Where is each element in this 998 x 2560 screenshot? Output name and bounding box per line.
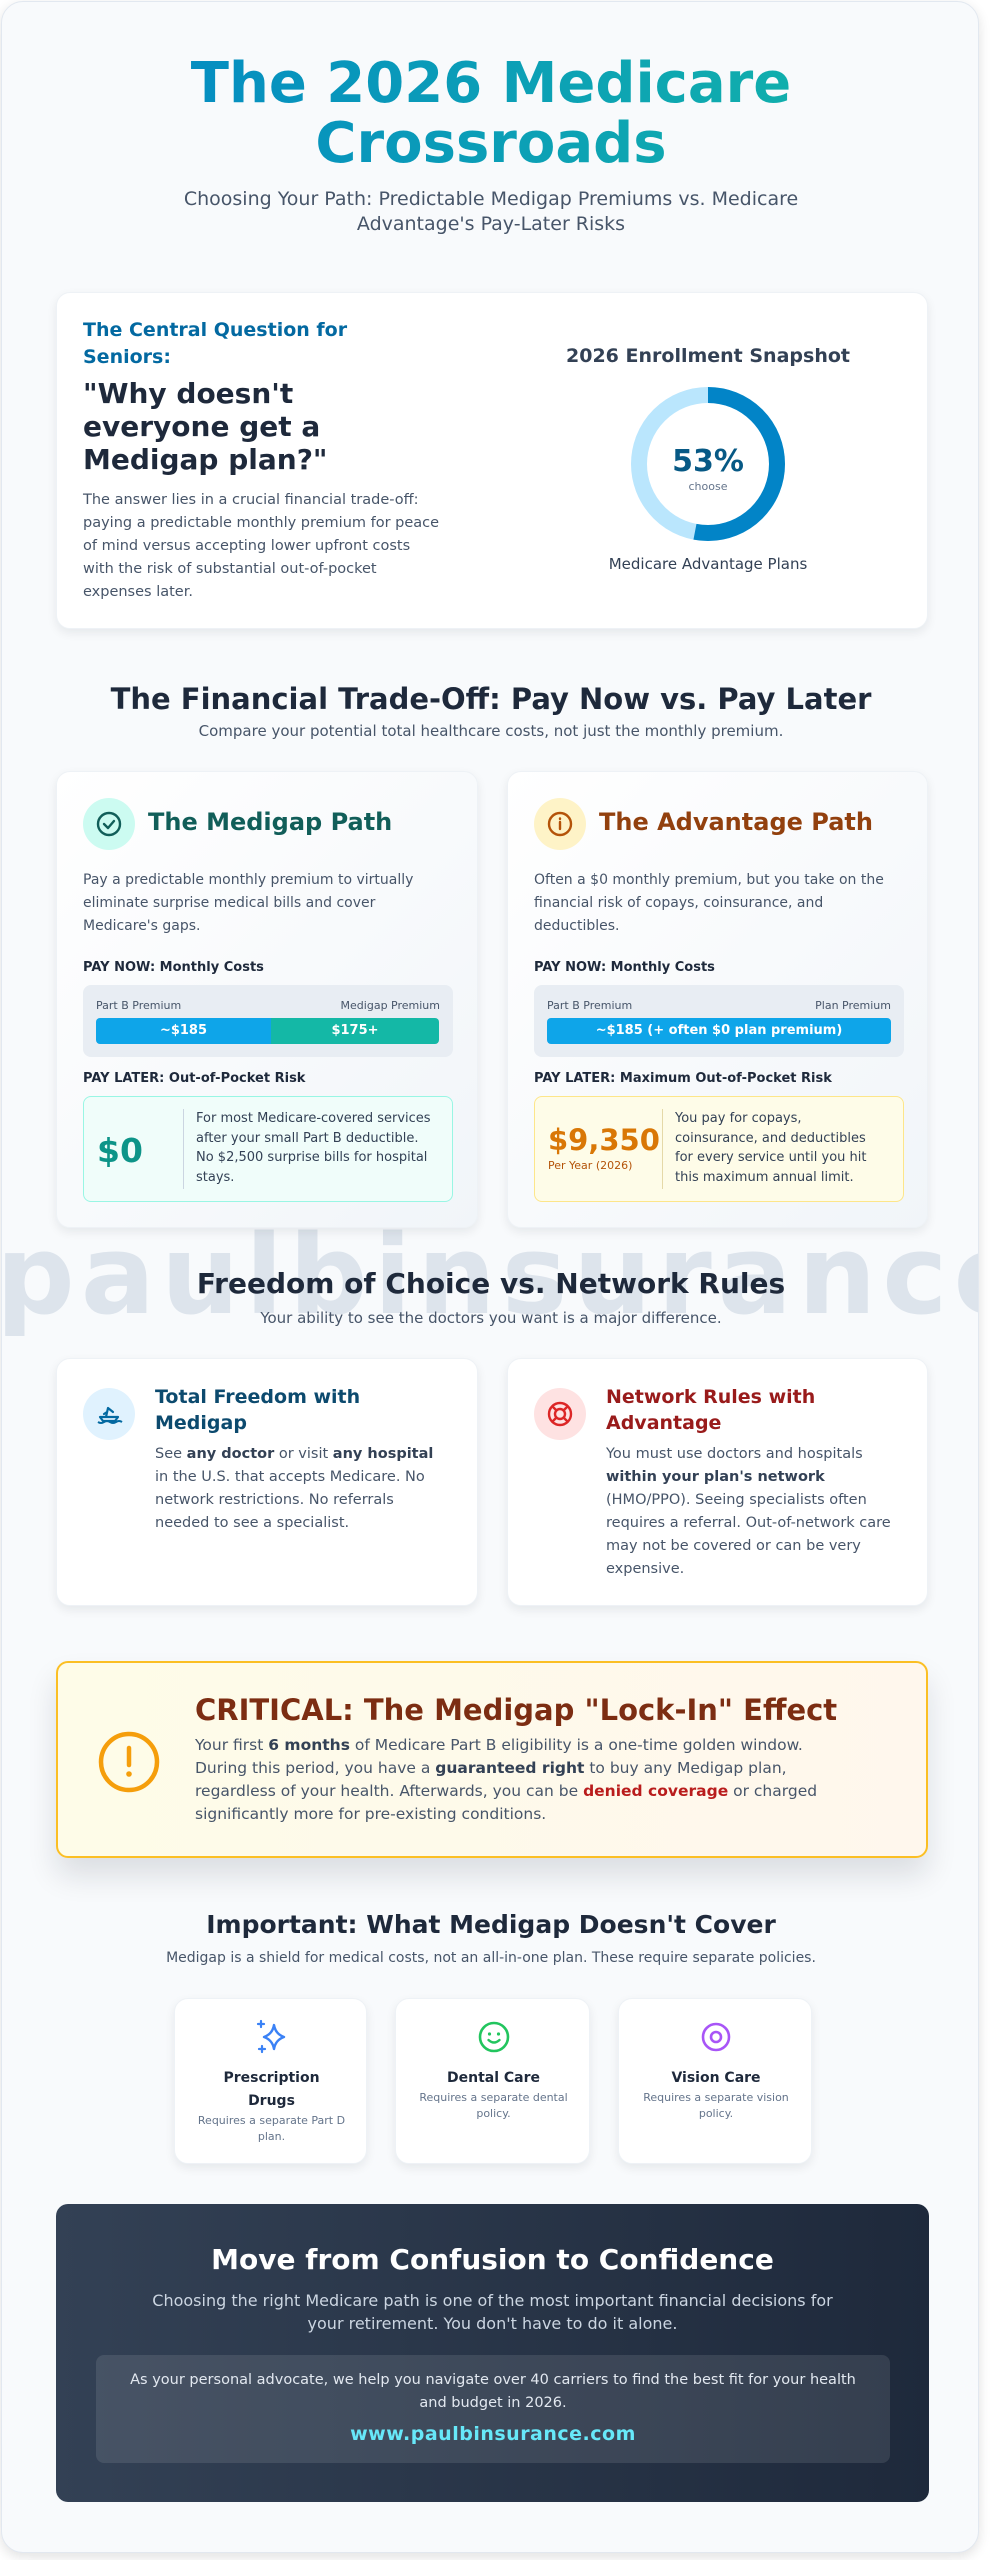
icon: ship — [83, 1388, 135, 1440]
label: pay now: PAY NOW: Monthly Costs — [534, 960, 715, 975]
title — [2, 54, 980, 174]
bar chart: monthly costs: Plan Premium — [815, 999, 891, 1012]
heading: Total Freedom with Medigap — [155, 1386, 360, 1434]
icon: sparkles — [256, 2020, 286, 2054]
chart: enrollment donut: 2026 Enrollment Snapshot — [566, 345, 850, 367]
callout: $9,350 risk: You pay for copays, coinsurance, and deductibles for every service until you hit this maximum annual limit. — [675, 1111, 866, 1184]
subheading: Your ability to see the doctors you want is a major difference. — [260, 1309, 722, 1327]
text: You must use doctors and hospitals within your plan's network (HMO/PPO). Seeing specialists often requires a referral. Out-of-network care may not be covered or can be very expensive. — [606, 1446, 891, 1577]
panel: dental care — [395, 1998, 590, 2164]
panel: intro — [56, 292, 928, 629]
icon: check — [83, 798, 135, 850]
panel: vision care: Vision Care — [671, 2070, 761, 2086]
label: pay later: PAY LATER: Out-of-Pocket Risk — [83, 1071, 305, 1086]
label: pay now: PAY NOW: Monthly Costs — [83, 960, 264, 975]
panel: network rules — [507, 1358, 928, 1606]
panel: advantage path — [507, 771, 928, 1228]
callout: $0 risk: For most Medicare-covered services after your small Part B deductible. No $2,500 surprise bills for hospital stays. — [196, 1111, 431, 1184]
heading: The Medigap Path — [148, 808, 392, 836]
chart: enrollment donut: Medicare Advantage Plans — [609, 555, 807, 573]
heading: The Advantage Path — [599, 808, 873, 836]
icon: smile — [478, 2022, 510, 2052]
icon: warning — [98, 1732, 160, 1792]
panel: dental care: Dental Care — [447, 2070, 540, 2086]
panel: prescription drugs: Prescription Drugs — [223, 2070, 320, 2109]
callout: $9,350 risk — [534, 1096, 904, 1202]
panel: vision care: Requires a separate vision policy. — [643, 2091, 789, 2120]
chart: enrollment donut: 53% — [672, 444, 744, 479]
panel: prescription drugs: Requires a separate Part D plan. — [198, 2114, 345, 2143]
quote: "Why doesn't everyone get a Medigap plan?" — [83, 377, 328, 476]
callout: advocate box: As your personal advocate, we help you navigate over 40 carriers to find the best fit for your health and budget in 2026. — [130, 2372, 856, 2411]
subheading: Compare your potential total healthcare costs, not just the monthly premium. — [199, 722, 783, 740]
chart: enrollment donut — [566, 345, 850, 573]
text: Choosing the right Medicare path is one of the most important financial decisions for your retirement. You don't have to do it alone. — [152, 2291, 833, 2333]
panel: vision care — [618, 1998, 812, 2164]
heading: Network Rules with Advantage — [606, 1386, 815, 1434]
callout: $0 risk: $0 — [97, 1131, 143, 1170]
callout: $9,350 risk: $9,350 — [548, 1123, 660, 1157]
bar chart: monthly costs: ~$185 (+ often $0 plan premium) — [596, 1023, 842, 1038]
subtitle: Choosing Your Path: Predictable Medigap Premiums vs. Medicare Advantage's Pay-Later Risks — [184, 188, 798, 235]
bar chart: monthly costs: $175+ — [331, 1023, 379, 1038]
heading: central question: The Central Question for Seniors: — [83, 319, 347, 368]
callout: $9,350 risk: Per Year (2026) — [548, 1159, 632, 1172]
heading: freedom of choice: Freedom of Choice vs. Network Rules — [197, 1267, 785, 1300]
bar chart: monthly costs: Part B Premium — [547, 999, 632, 1012]
panel: call to action — [56, 2204, 929, 2502]
label: pay later: PAY LATER: Maximum Out-of-Pocket Risk — [534, 1071, 832, 1086]
text: See any doctor or visit any hospital in the U.S. that accepts Medicare. No network restrictions. No referrals needed to see a specialist. — [155, 1446, 433, 1531]
icon: info — [534, 798, 586, 850]
subheading: Medigap is a shield for medical costs, not an all-in-one plan. These require separate policies. — [166, 1950, 816, 1966]
bar chart: monthly costs — [534, 985, 904, 1057]
callout: advocate box — [96, 2355, 890, 2463]
callout: critical lock-in — [56, 1661, 928, 1858]
heading: CRITICAL: The Medigap "Lock-In" Effect — [195, 1693, 837, 1727]
heading: financial trade-off: The Financial Trade-Off: Pay Now vs. Pay Later — [111, 682, 871, 716]
bar chart: monthly costs: ~$185 — [160, 1023, 207, 1038]
callout: $0 risk — [83, 1096, 453, 1202]
heading: not covered: Important: What Medigap Doesn't Cover — [206, 1910, 776, 1939]
chart: enrollment donut: choose — [689, 480, 728, 493]
text: Your first 6 months of Medicare Part B eligibility is a one-time golden window. During this period, you have a guaranteed right to buy any Medigap plan, regardless of your health. Afterwards, you can be denied coverage or charged significantly more for pre-existing conditions. — [195, 1736, 817, 1823]
bar chart: monthly costs: Part B Premium — [96, 999, 181, 1012]
text: Often a $0 monthly premium, but you take on the financial risk of copays, coinsurance, and deductibles. — [534, 872, 884, 934]
bar chart: monthly costs: Medigap Premium — [341, 999, 440, 1012]
bar chart: monthly costs — [83, 985, 453, 1057]
icon: eye — [702, 2022, 730, 2052]
panel: dental care: Requires a separate dental policy. — [419, 2091, 568, 2120]
icon: lifebuoy — [534, 1388, 586, 1440]
panel: total freedom — [56, 1358, 478, 1606]
heading: Move from Confusion to Confidence — [211, 2243, 774, 2276]
text: Pay a predictable monthly premium to virtually eliminate surprise medical bills and cover Medicare's gaps. — [83, 872, 413, 934]
callout: advocate box: www.paulbinsurance.com — [350, 2423, 636, 2445]
title: The 2026 Medicare Crossroads — [191, 51, 791, 176]
panel: medigap path — [56, 771, 478, 1228]
text block: intro: The answer lies in a crucial financial trade-off: paying a predictable monthly premium for peace of mind versus accepting lower upfront costs with the risk of substantial out-of-pocket expenses later. — [83, 492, 439, 600]
panel: prescription drugs — [174, 1998, 367, 2164]
